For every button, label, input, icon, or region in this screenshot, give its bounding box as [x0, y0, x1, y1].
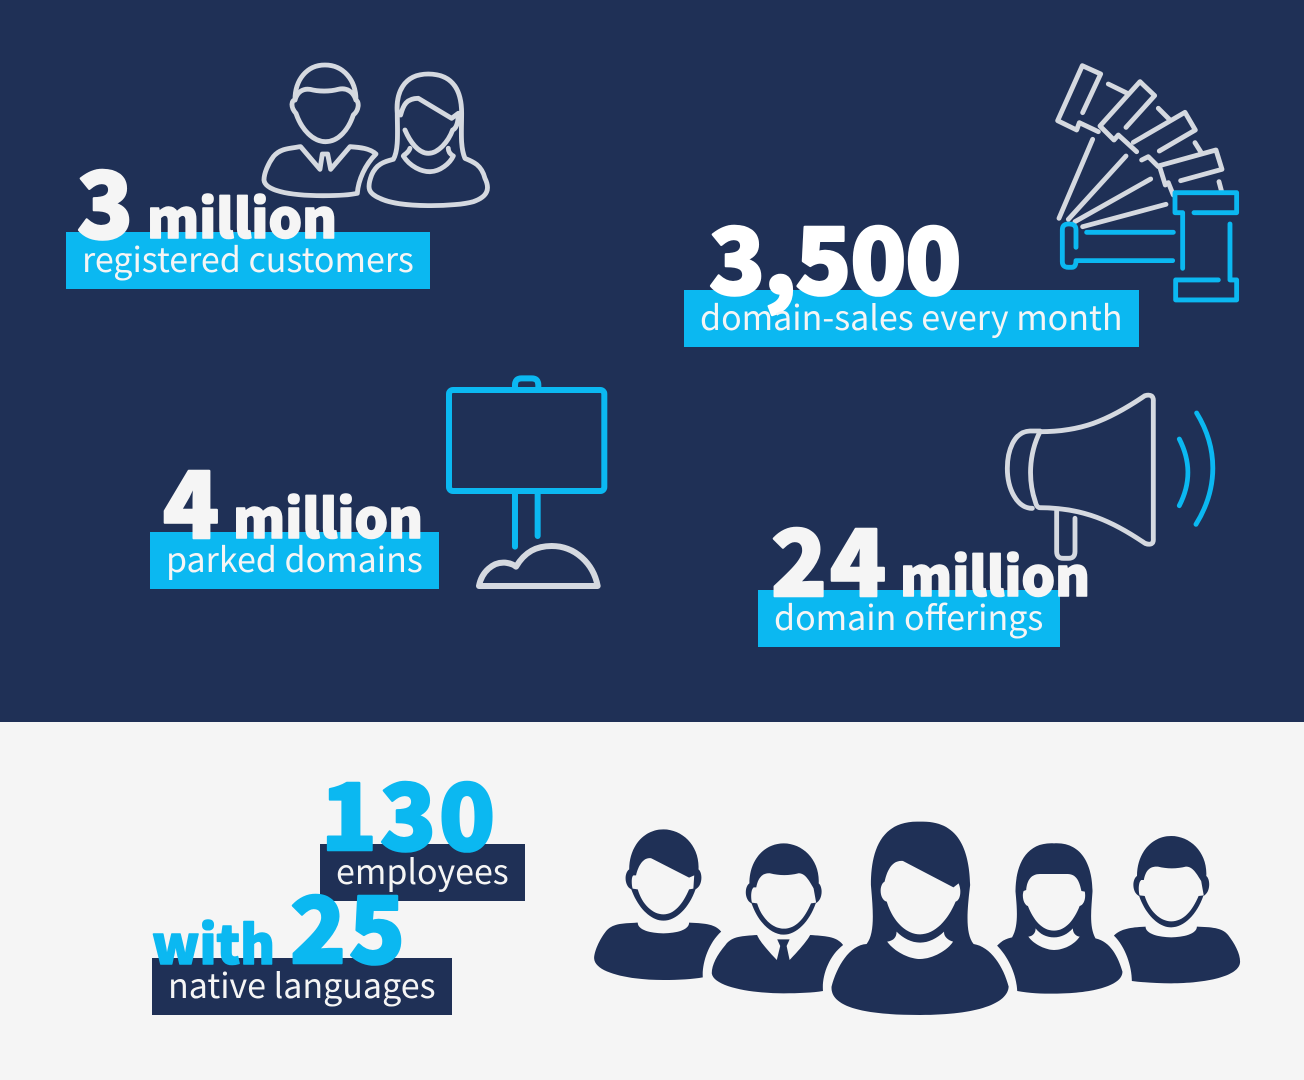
caption: native languages: [168, 959, 435, 1008]
unit: million: [233, 478, 423, 554]
number: 3: [77, 132, 133, 265]
caption: parked domains: [166, 533, 423, 582]
number: 3,500: [709, 188, 960, 321]
number: 4: [163, 432, 219, 565]
person: large woman: [825, 817, 1016, 1021]
stat: 3,500 domain sales: [684, 188, 1139, 347]
label bar: [684, 290, 1139, 347]
stat: 3 million registered customers: [66, 132, 430, 289]
person: right man: [1114, 836, 1240, 983]
person: left man: [594, 829, 721, 980]
unit: million: [900, 536, 1090, 612]
stat: with 25 native languages: [152, 857, 452, 1015]
number: 24: [771, 490, 889, 623]
icon: megaphone: [1007, 395, 1213, 558]
stat: 24 million domain offerings: [758, 490, 1090, 647]
label bar: [66, 232, 430, 289]
icon: two customers outline: [264, 65, 487, 206]
label bar: [758, 590, 1060, 647]
stat: 4 million parked domains: [150, 432, 439, 589]
caption: employees: [336, 845, 509, 894]
label bar: [152, 958, 452, 1015]
person: small woman: [997, 843, 1122, 994]
panel: light bottom background: [0, 722, 1304, 1080]
label bar: [150, 532, 439, 589]
label bar: [320, 844, 525, 901]
caption: registered customers: [82, 233, 414, 282]
caption: domain-sales every month: [700, 291, 1122, 340]
caption: domain offerings: [774, 591, 1043, 640]
unit: million: [147, 178, 337, 254]
panel: dark top background: [0, 0, 1304, 722]
person: man with tie: [712, 843, 843, 993]
stat: 130 employees: [320, 744, 525, 901]
icon: hammer fan sales: [1058, 66, 1237, 300]
word: with: [152, 904, 275, 980]
number: 25: [290, 857, 408, 990]
number: 130: [321, 744, 498, 877]
icon: team of five: [594, 817, 1240, 1021]
icon: parked domain sign: [449, 378, 604, 586]
